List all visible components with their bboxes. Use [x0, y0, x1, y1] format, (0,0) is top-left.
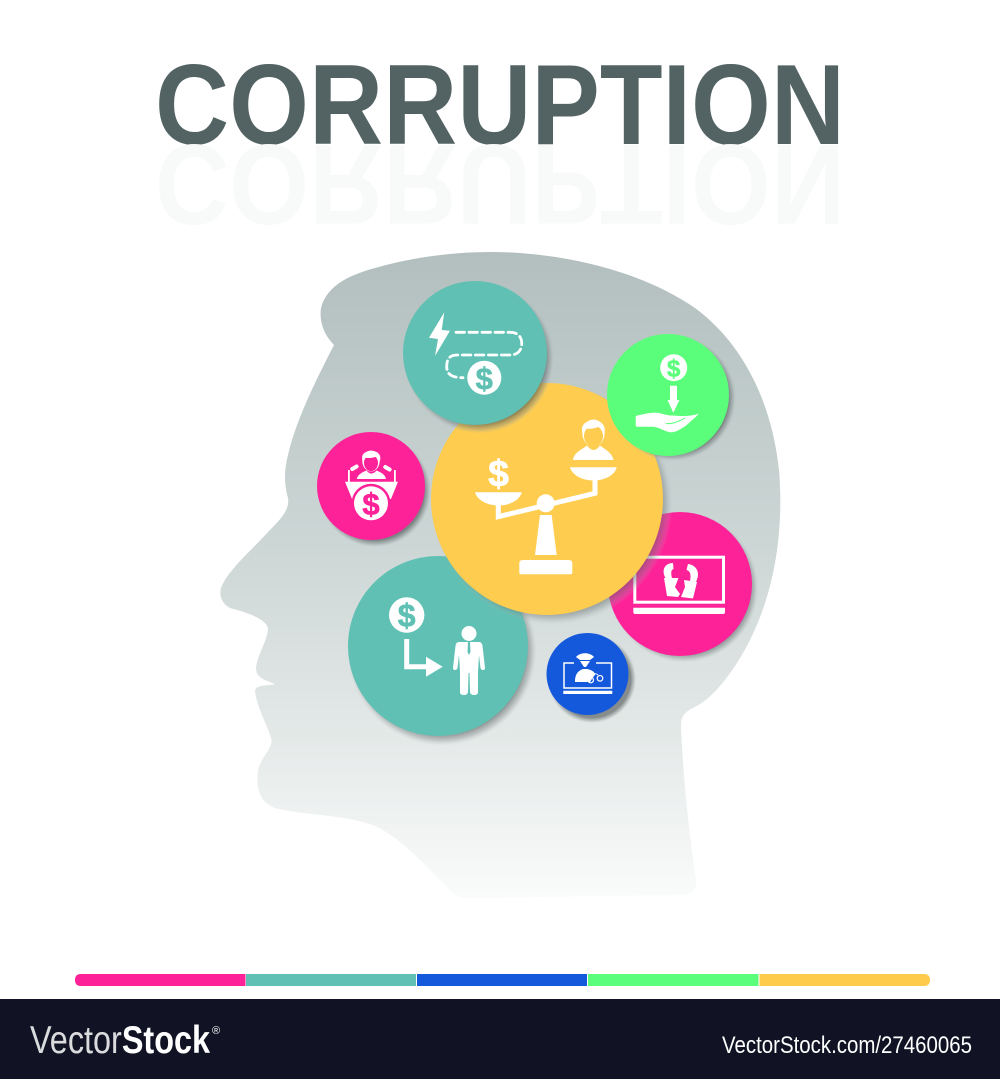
circle: pink speaker with money: [317, 432, 431, 547]
circle: teal energy money: [403, 281, 554, 433]
icon: money flowing to businessman: $: [398, 598, 416, 634]
icon: lightning bolt with dashed path to coin: $: [476, 361, 493, 396]
footer band: [0, 999, 1000, 1079]
title: CORRUPTION: [155, 42, 845, 169]
icon: broken lock on laptop: [633, 557, 725, 614]
icon: official at podium with coin: $: [362, 486, 380, 521]
icon: coin dropping into hand: $: [667, 355, 681, 382]
colour bar: [75, 974, 930, 986]
circle: pink laptop lock: [608, 512, 758, 662]
icon: lightning bolt with dashed path to coin: [429, 312, 522, 396]
icon: money flowing to businessman: [389, 597, 485, 695]
circle: green hand receiving money: [607, 334, 736, 461]
circle: yellow scale (central): [431, 383, 672, 624]
title reflection: CORRUPTION: [155, 120, 845, 247]
icon: balance scale weighing money against person: [475, 420, 617, 574]
head silhouette: [220, 252, 780, 898]
icon: police officer and handcuffs on laptop: [563, 653, 612, 694]
footer logo: VectorStock: [30, 1019, 210, 1062]
circle: blue police laptop: [546, 633, 636, 723]
icon: balance scale weighing money against person: $: [488, 453, 509, 494]
circle: teal bribe to person: [348, 556, 536, 745]
registered mark: ®: [212, 1025, 220, 1037]
